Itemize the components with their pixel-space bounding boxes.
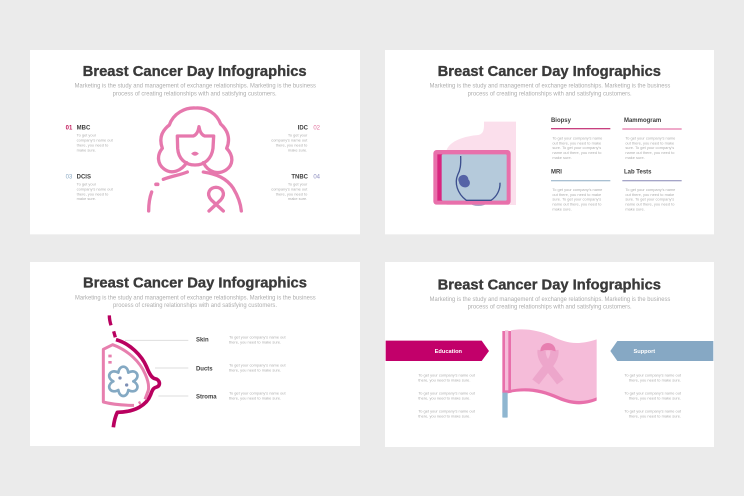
item: Lab Tests: sure. To get your company's — [625, 197, 674, 202]
subtitle text — [75, 84, 316, 97]
subtitle text: process of creating relationships with and satisfying customers. — [468, 305, 632, 311]
item: TNBC: company's name out — [271, 186, 308, 191]
item: MRI: make sure. — [552, 207, 572, 212]
item: Lab Tests: out there, you need to make — [625, 192, 674, 197]
icon: pink ribbon flag — [502, 329, 597, 418]
title: Breast Cancer Day Infographics — [438, 277, 661, 293]
item: TNBC: 04 — [313, 174, 321, 180]
item: MBC: To get your — [77, 133, 97, 138]
label: Skin — [196, 335, 286, 345]
item: DCIS: there, you need to — [77, 191, 109, 196]
subtitle text — [430, 297, 670, 311]
subtitle text: Marketing is the study and management of exchange relationships. Marketing is the business — [75, 295, 316, 301]
label: Skin: there, you need to make sure. — [229, 340, 281, 345]
item: MRI: out there, you need to make — [552, 192, 601, 197]
item: TNBC: TNBC — [291, 174, 309, 180]
label: Ducts: To get your company's name out — [229, 363, 286, 368]
label: Stroma: Stroma — [196, 395, 217, 401]
item: MRI: name out there, you need to — [552, 202, 602, 207]
text: support notes: To get your company's name out — [624, 409, 682, 414]
item: IDC: To get your — [288, 133, 308, 138]
item: Mammogram: make sure. — [625, 155, 645, 160]
item: DCIS — [66, 174, 114, 201]
item: DCIS: To get your — [77, 181, 97, 186]
item: Biopsy: To get your company's name — [552, 135, 602, 140]
title: Breast Cancer Day Infographics — [438, 64, 661, 80]
icon: woman with awareness ribbon — [149, 108, 241, 211]
text: education notes — [418, 373, 476, 418]
item: Biopsy: make sure. — [552, 155, 572, 160]
item: MBC: MBC — [77, 125, 91, 131]
item: IDC: IDC — [298, 125, 309, 131]
subtitle text: process of creating relationships with and satisfying customers. — [113, 91, 277, 97]
item: Mammogram: name out there, you need to — [625, 150, 675, 155]
panel: screening methods — [385, 50, 714, 234]
item: Mammogram: Mammogram — [624, 118, 661, 124]
item: TNBC — [271, 174, 321, 201]
label: Ducts: there, you need to make sure. — [229, 368, 281, 373]
item: Lab Tests: name out there, you need to — [625, 202, 675, 207]
item: IDC: make sure. — [288, 147, 307, 152]
icon: mammogram screen — [433, 122, 516, 206]
item: MRI: To get your company's name — [552, 187, 602, 192]
item: TNBC: To get your — [288, 181, 308, 186]
item: Lab Tests: make sure. — [625, 207, 645, 212]
item: MRI — [551, 170, 610, 212]
item: Biopsy: name out there, you need to — [552, 150, 602, 155]
text: education notes: To get your company's name out — [418, 409, 476, 414]
item: MBC: make sure. — [77, 147, 96, 152]
item: MBC: 01 — [66, 125, 73, 131]
item: DCIS: 03 — [66, 174, 73, 180]
subtitle text: process of creating relationships with and satisfying customers. — [468, 91, 632, 97]
label: Ducts: Ducts — [196, 366, 213, 372]
item: DCIS: DCIS — [77, 174, 91, 180]
item: Mammogram: out there, you need to make — [625, 140, 674, 145]
arrow: Support: Support — [633, 349, 655, 355]
text: support notes: there, you need to make sure. — [629, 378, 681, 383]
item: Biopsy: Biopsy — [551, 118, 572, 124]
subtitle text: Marketing is the study and management of exchange relationships. Marketing is the business — [75, 84, 316, 90]
label: Skin: Skin — [196, 338, 209, 344]
item: Lab Tests — [622, 170, 682, 212]
subtitle text: Marketing is the study and management of exchange relationships. Marketing is the business — [430, 84, 670, 90]
subtitle text: Marketing is the study and management of exchange relationships. Marketing is the business — [430, 297, 670, 303]
text: education notes: there, you need to make sure. — [418, 378, 470, 383]
item: IDC: company's name out — [271, 138, 308, 143]
item: Mammogram: sure. To get your company's — [625, 145, 674, 150]
title: Breast Cancer Day Infographics — [83, 276, 307, 292]
item: IDC: 02 — [313, 125, 321, 131]
text: education notes: there, you need to make sure. — [418, 395, 470, 400]
arrow: Support — [610, 341, 713, 361]
item: TNBC: there, you need to — [276, 191, 308, 196]
item: IDC: there, you need to — [276, 142, 308, 147]
item: Mammogram — [622, 118, 682, 160]
item: MBC: there, you need to — [77, 142, 109, 147]
text: support notes: To get your company's name out — [624, 391, 682, 396]
item: DCIS: make sure. — [77, 196, 96, 201]
label: Skin: To get your company's name out — [229, 335, 286, 340]
item: DCIS: company's name out — [77, 186, 114, 191]
label: Ducts — [196, 363, 286, 373]
item: MBC — [66, 125, 114, 152]
panel: breast anatomy — [30, 262, 360, 446]
item: MRI: MRI — [551, 170, 562, 176]
label: Stroma — [196, 391, 286, 401]
arrow: Education — [386, 341, 489, 361]
item: Lab Tests: To get your company's name — [625, 187, 675, 192]
subtitle text — [430, 84, 670, 97]
item: MBC: company's name out — [77, 138, 114, 143]
text: support notes — [624, 373, 682, 418]
title: Breast Cancer Day Infographics — [83, 64, 307, 80]
panel: awareness flag — [385, 262, 714, 447]
item: Lab Tests: Lab Tests — [624, 170, 652, 176]
item: IDC — [271, 125, 321, 152]
arrow: Education: Education — [435, 349, 463, 355]
text: education notes: To get your company's name out — [418, 391, 476, 396]
text: support notes: To get your company's name out — [624, 373, 682, 378]
item: Biopsy: out there, you need to make — [552, 140, 601, 145]
subtitle text — [75, 295, 316, 309]
item: Mammogram: To get your company's name — [625, 135, 675, 140]
subtitle text: process of creating relationships with and satisfying customers. — [113, 303, 277, 309]
label: Stroma: To get your company's name out — [229, 391, 286, 396]
panel: woman with ribbon, four cancer types — [30, 50, 360, 234]
icon: breast cross-section — [103, 315, 188, 427]
item: Biopsy: sure. To get your company's — [552, 145, 601, 150]
label: Stroma: there, you need to make sure. — [229, 396, 281, 401]
item: MRI: sure. To get your company's — [552, 197, 601, 202]
text: support notes: there, you need to make sure. — [629, 413, 681, 418]
text: support notes: there, you need to make sure. — [629, 395, 681, 400]
item: Biopsy — [551, 118, 610, 160]
text: education notes: To get your company's name out — [418, 373, 476, 378]
item: TNBC: make sure. — [288, 196, 307, 201]
text: education notes: there, you need to make sure. — [418, 413, 470, 418]
